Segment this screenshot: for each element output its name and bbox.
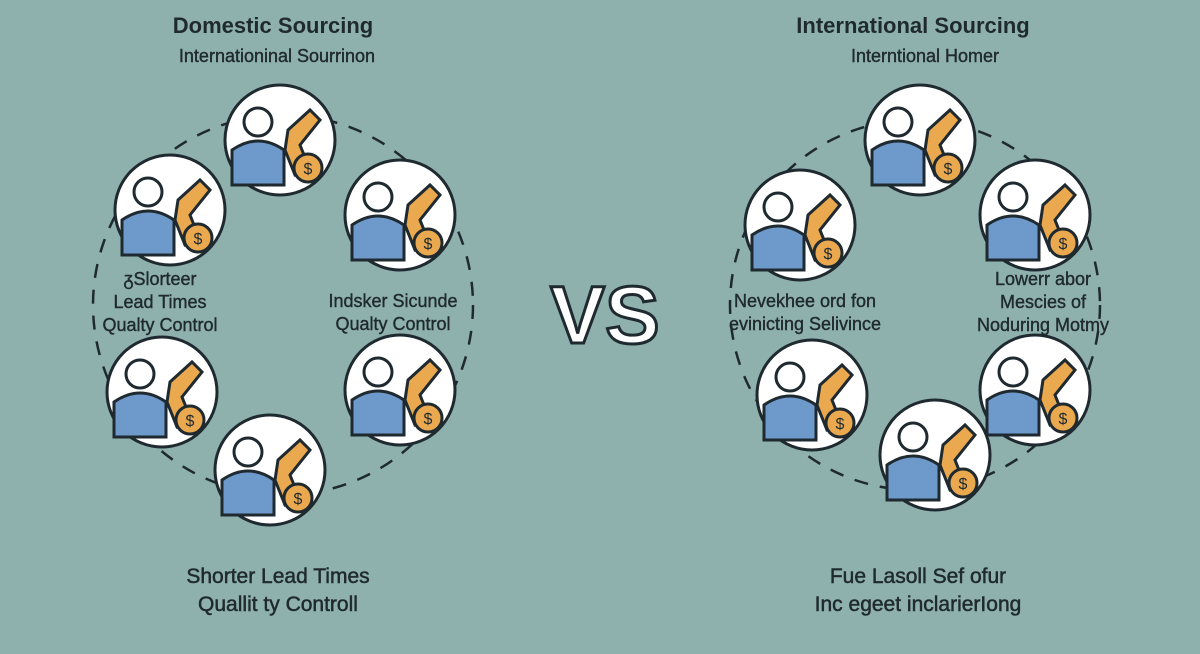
label left-left: Qualty Control [102,315,218,335]
label right-right: Mescies of [1000,292,1086,312]
bottom text left: Shorter Lead Times [186,565,370,588]
label left-left: Lead Times [113,292,207,312]
icon: right top [865,85,975,195]
bottom text left [186,565,370,616]
label left-left [102,269,218,336]
left dashed circle [93,115,473,495]
label left-right: Indsker Sicunde [328,291,458,311]
icon: left top [225,85,335,195]
label left-right [328,291,458,334]
bottom text left: Quallit ty Controll [198,593,358,616]
icon: right lower-right [980,335,1090,445]
subtitle right: Interntional Homer [851,46,999,66]
label left-left: ᵹSlorteer [123,269,197,289]
title left: Domestic Sourcing [173,13,373,38]
bottom text right: Fue Lasoll Sef ofur [830,565,1006,588]
icon: right right [980,160,1090,270]
icon: right bottom [880,400,990,510]
icon: left lower-left [107,337,217,447]
VS: VS [550,270,660,361]
bottom text right [815,565,1021,616]
label left-right: Qualty Control [335,314,451,334]
label right-left: Nevekhee ord fon [734,291,876,311]
label right-right: Lowerr abor [995,269,1091,289]
subtitle left: Internationinal Sourrinon [179,46,375,66]
title right: International Sourcing [796,13,1030,38]
icon: left right [345,160,455,270]
label right-left [729,291,881,334]
right dashed circle [730,120,1100,490]
icon: left bottom [215,415,325,525]
icon: left upper-left [115,155,225,265]
bottom text right: Inc egeet inclarierIong [815,593,1021,616]
icon: left lower-right [345,335,455,445]
label right-left: evinicting Selivince [729,314,881,334]
icon: right lower-left [757,340,867,450]
icon: right left [745,170,855,280]
label right-right [977,269,1110,336]
label right-right: Noduring Motmy [977,315,1109,335]
